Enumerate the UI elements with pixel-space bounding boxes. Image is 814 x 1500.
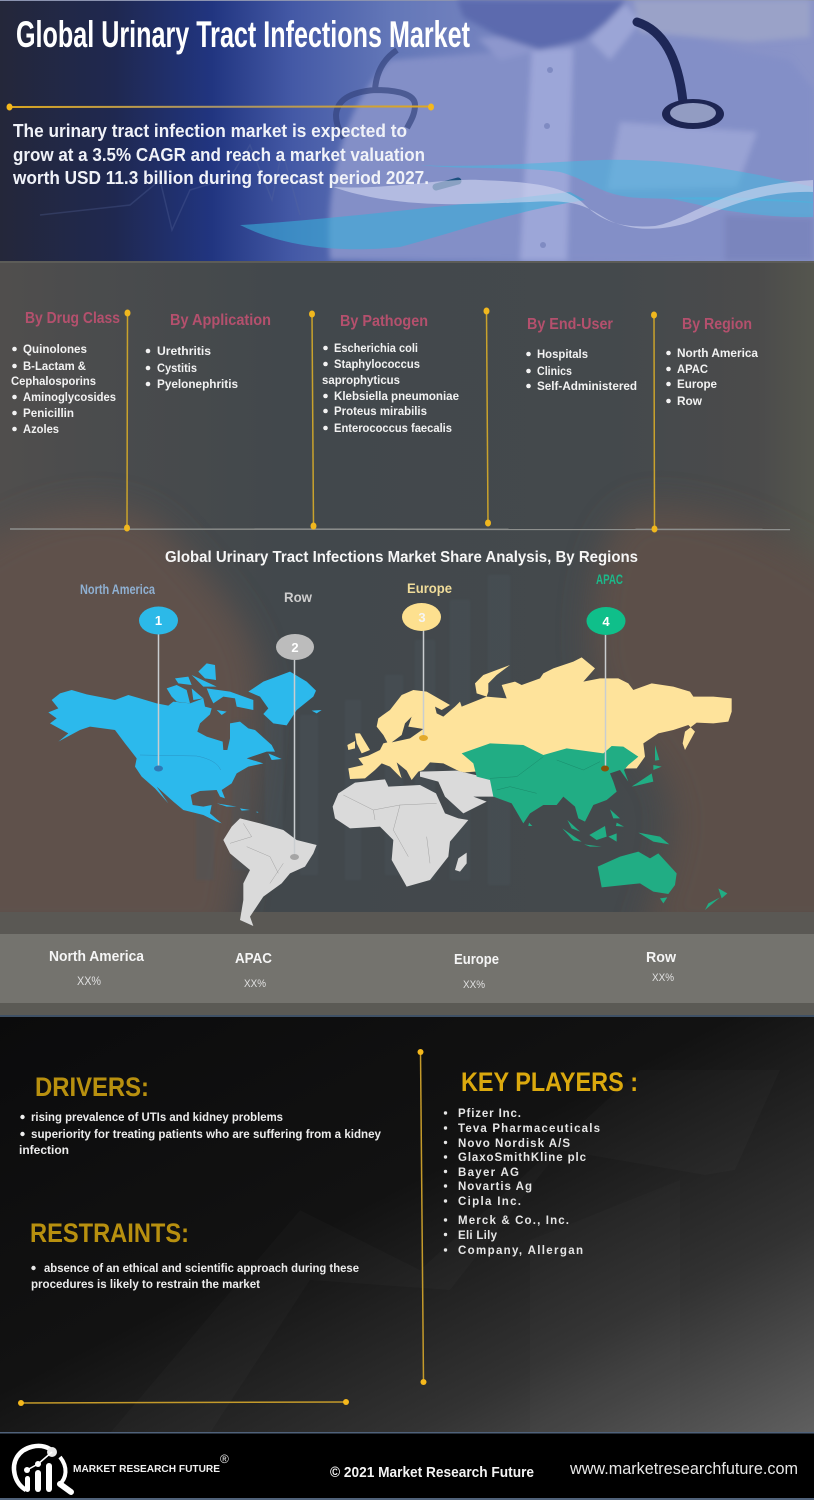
drivers block: infection xyxy=(19,1143,69,1157)
world map xyxy=(48,571,732,926)
callout: north america pin: North America xyxy=(80,581,155,597)
title: Global Urinary Tract Infections Market xyxy=(16,14,470,55)
segment: by region: APAC xyxy=(677,362,708,376)
segment: by region xyxy=(666,316,758,408)
segment: by end-user xyxy=(526,316,637,393)
segment: by pathogen: Staphylococcus xyxy=(334,357,420,371)
segment: by end-user: By End-User xyxy=(527,316,613,333)
drivers block xyxy=(19,1072,381,1157)
restraints block: procedures is likely to restrain the market xyxy=(31,1277,260,1291)
heading: market share analysis: Global Urinary Tract Infections Market Share Analysis, By Regions xyxy=(165,549,638,566)
share: north america: XX% xyxy=(77,976,101,988)
share: row: Row xyxy=(646,950,677,966)
key players block: KEY PLAYERS : xyxy=(461,1067,638,1097)
callout: europe pin xyxy=(402,580,452,741)
share: apac xyxy=(235,951,272,990)
share: apac: XX% xyxy=(244,978,266,990)
segment: by pathogen: Escherichia coli xyxy=(334,341,418,355)
decoration: ecg trace xyxy=(40,145,300,230)
share: apac: APAC xyxy=(235,951,272,967)
brand name xyxy=(73,1452,229,1475)
map region: asia pacific xyxy=(462,743,727,910)
panel: hero header xyxy=(0,0,814,261)
segment: by drug class: Cephalosporins xyxy=(11,374,96,388)
segment: by drug class: Azoles xyxy=(23,422,59,436)
group: segmentation columns xyxy=(11,310,758,436)
icon: stethoscope xyxy=(336,22,724,187)
segment: by region: By Region xyxy=(682,316,752,333)
callout: europe pin: 3 xyxy=(418,610,426,625)
copyright: © 2021 Market Research Future xyxy=(330,1464,534,1481)
callout: row pin xyxy=(276,589,314,860)
callout: row pin: Row xyxy=(284,589,312,605)
share: europe: XX% xyxy=(463,979,485,991)
segment: by application xyxy=(146,312,271,391)
panel: drivers, restraints and key players xyxy=(0,1015,814,1433)
brand name: ® xyxy=(220,1452,229,1466)
segment: by end-user: Self-Administered xyxy=(537,379,637,393)
drivers block: rising prevalence of UTIs and kidney problems xyxy=(31,1110,283,1124)
brand name: MARKET RESEARCH FUTURE xyxy=(73,1464,220,1475)
segment: by drug class: Quinolones xyxy=(23,342,87,356)
segment: by drug class: By Drug Class xyxy=(25,310,120,327)
segment: by region: Row xyxy=(677,394,703,408)
key players block: Bayer AG xyxy=(458,1167,519,1179)
segment: by pathogen xyxy=(322,313,459,435)
callout: apac pin: 4 xyxy=(602,614,610,629)
legend band: regional shares xyxy=(0,934,814,1015)
segment: by pathogen: saprophyticus xyxy=(322,373,400,387)
key players block: Teva Pharmaceuticals xyxy=(458,1123,600,1135)
restraints block: RESTRAINTS: xyxy=(30,1218,189,1248)
share: north america: North America xyxy=(49,949,145,965)
key players block: GlaxoSmithKline plc xyxy=(458,1152,587,1164)
decoration: light waves xyxy=(240,160,813,249)
market summary text: worth USD 11.3 billion during forecast period 2027. xyxy=(12,168,429,188)
segment: by application: Pyelonephritis xyxy=(157,377,238,391)
map region: europe and russia xyxy=(347,657,732,780)
horizontal gold divider xyxy=(18,1399,349,1406)
segment: by application: Urethritis xyxy=(157,344,211,358)
share: row xyxy=(646,950,677,984)
drivers block: DRIVERS: xyxy=(35,1072,149,1102)
callout: row pin: 2 xyxy=(291,640,299,655)
drivers block: superiority for treating patients who are suffering from a kidney xyxy=(31,1127,381,1141)
market summary text xyxy=(12,121,429,188)
panel: segmentation and regional map xyxy=(0,261,814,1015)
key players block: Eli Lily xyxy=(458,1230,498,1242)
segment: by drug class: B-Lactam & xyxy=(23,359,86,373)
map region: south america, africa and middle east xyxy=(223,771,494,926)
segment: by end-user: Hospitals xyxy=(537,347,588,361)
column dividers with gold endpoints xyxy=(10,308,790,532)
map region: north america xyxy=(48,663,322,823)
callout: europe pin: Europe xyxy=(407,580,452,596)
share: europe xyxy=(454,952,499,991)
panel: footer xyxy=(0,1432,814,1500)
key players block xyxy=(444,1067,638,1257)
segment: by drug class: Aminoglycosides xyxy=(23,390,116,404)
callout: apac pin xyxy=(586,571,626,772)
callout: north america pin: 1 xyxy=(155,613,162,628)
segment: by region: Europe xyxy=(677,377,717,391)
sea cut-outs: baltic, caspian xyxy=(392,712,423,742)
market summary text: The urinary tract infection market is expected to xyxy=(13,121,407,141)
key players block: Company, Allergan xyxy=(458,1245,583,1257)
website url: www.marketresearchfuture.com xyxy=(569,1460,798,1478)
key players block: Novartis Ag xyxy=(458,1181,532,1193)
segment: by drug class: Penicillin xyxy=(23,406,74,420)
share: row: XX% xyxy=(652,972,674,984)
segment: by end-user: Clinics xyxy=(537,364,572,378)
callout: apac pin: APAC xyxy=(596,571,623,587)
segment: by pathogen: Enterococcus faecalis xyxy=(334,421,452,435)
key players block: Pfizer Inc. xyxy=(458,1108,521,1120)
icon: market research future logo xyxy=(14,1446,71,1492)
segment: by pathogen: Klebsiella pneumoniae xyxy=(334,389,459,403)
restraints block xyxy=(30,1218,359,1291)
callout: north america pin xyxy=(80,581,178,772)
share: europe: Europe xyxy=(454,952,499,968)
key players block: Merck & Co., Inc. xyxy=(458,1215,569,1227)
segment: by drug class xyxy=(11,310,120,436)
restraints block: absence of an ethical and scientific approach during these xyxy=(44,1261,359,1275)
segment: by application: By Application xyxy=(170,312,271,329)
divider with gold endpoints xyxy=(6,104,434,110)
vertical gold divider xyxy=(418,1049,426,1385)
segment: by region: North America xyxy=(677,346,758,360)
key players block: Novo Nordisk A/S xyxy=(458,1138,570,1150)
segment: by pathogen: Proteus mirabilis xyxy=(334,404,427,418)
market summary text: grow at a 3.5% CAGR and reach a market valuation xyxy=(13,145,425,165)
segment: by application: Cystitis xyxy=(157,361,197,375)
segment: by pathogen: By Pathogen xyxy=(340,313,428,330)
share: north america xyxy=(49,949,145,988)
key players block: Cipla Inc. xyxy=(458,1196,521,1208)
